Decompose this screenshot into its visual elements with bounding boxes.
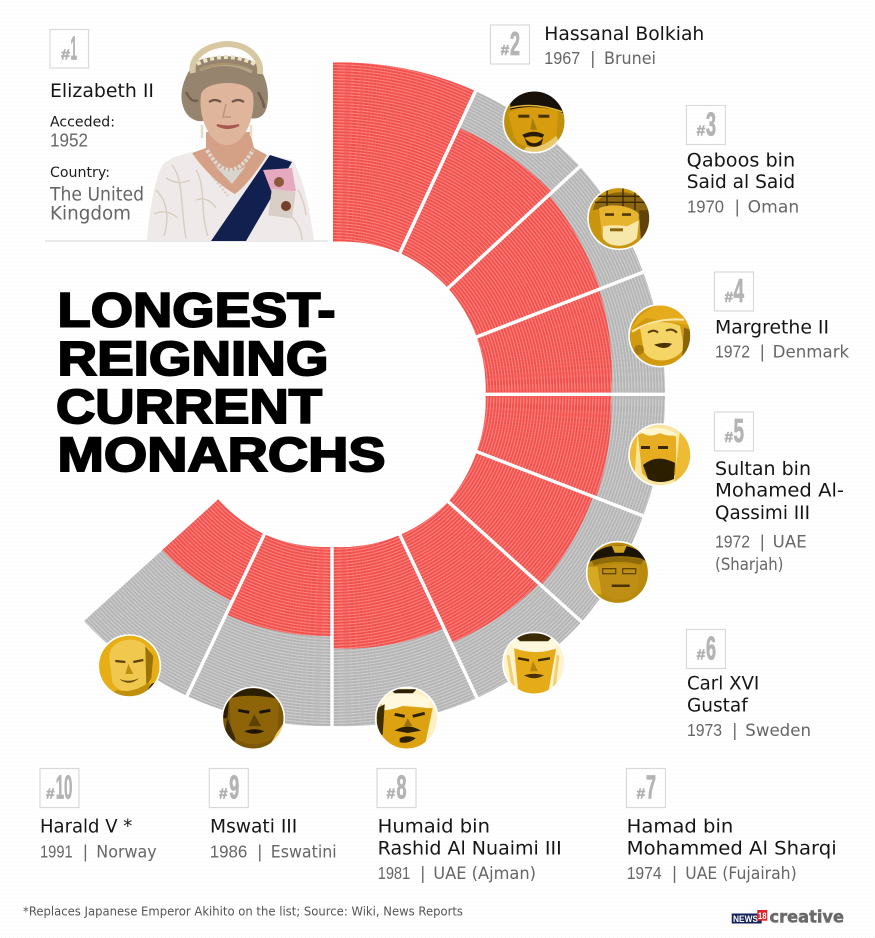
- nose: [223, 104, 231, 117]
- entry 2: Hassanal Bolkiah: [490, 23, 704, 68]
- sector 9 gray track: [187, 534, 332, 726]
- rank badge 5: #: [724, 429, 734, 446]
- sector 4 red bar: [477, 289, 612, 394]
- title: MONARCHS: [58, 429, 386, 482]
- entry 1 text: Elizabeth II: Elizabeth II: [50, 80, 154, 102]
- entry 4: Margrethe II: Margrethe II: [715, 316, 829, 338]
- entry 1 text: Elizabeth II: Kingdom: [50, 204, 131, 224]
- portrait: Harald V: [98, 635, 160, 697]
- entry 8: Humaid bin Rashid Al Nuaimi III: UAE (Ajman): [433, 864, 536, 883]
- entry 8: Humaid bin Rashid Al Nuaimi III: 1981: [378, 863, 410, 883]
- entry 5: Sultan bin Mohamed Al-Qassimi III: Qassimi III: [715, 502, 810, 524]
- rank badge 1: 1: [70, 30, 77, 66]
- entry 5: Sultan bin Mohamed Al-Qassimi III: Mohamed Al-: [715, 480, 844, 502]
- rank badge 1: [50, 30, 88, 68]
- entry 5: Sultan bin Mohamed Al-Qassimi III: [714, 412, 844, 574]
- earrings: [202, 125, 251, 138]
- entry 10: Harald V: Norway: [96, 842, 157, 861]
- entry 7: Hamad bin Mohammed Al Sharqi: |: [672, 864, 677, 883]
- entry 6: Carl XVI Gustaf: Carl XVI: [687, 672, 759, 694]
- entry 1 text: Elizabeth II: Acceded:: [50, 114, 115, 130]
- portrait: Elizabeth II: [147, 44, 314, 241]
- sector 2 red bar: [400, 128, 552, 288]
- rank badge 3: #: [697, 122, 706, 140]
- sector 3 red bar: [448, 195, 600, 337]
- rank badge 7: 7: [646, 768, 656, 806]
- chart: radial reign-length bars: [84, 62, 668, 729]
- sector 5 gray track: [477, 394, 665, 516]
- rank badge 8: [377, 768, 416, 808]
- sector 7 red bar: [400, 502, 539, 643]
- rank badge 10: 10: [56, 768, 72, 806]
- sector 5 red bar: [477, 394, 611, 498]
- rank badge 2: 2: [510, 25, 520, 62]
- entry 1 text: Elizabeth II: Country:: [50, 165, 110, 181]
- necklace: [207, 150, 253, 170]
- portrait: Margrethe II: [629, 305, 691, 367]
- sash: [211, 155, 292, 241]
- sector 8 gray track: [332, 535, 477, 726]
- rank badge 9: [209, 768, 248, 808]
- portrait: Humaid bin Rashid Al Nuaimi III: [376, 687, 438, 749]
- entry 5: Sultan bin Mohamed Al-Qassimi III: UAE: [773, 532, 807, 552]
- entry 1 text: Elizabeth II: The United: [49, 184, 144, 206]
- entry 7: Hamad bin Mohammed Al Sharqi: UAE (Fujairah): [685, 864, 797, 883]
- entry 4: Margrethe II: Denmark: [773, 342, 850, 362]
- neck and chest: [192, 132, 267, 194]
- portrait: Sultan bin Mohamed Al-Qassimi III: [629, 424, 691, 486]
- entry 9: Mswati III: Eswatini: [271, 842, 337, 861]
- mouth: [217, 125, 239, 128]
- rank badge 10: #: [46, 786, 55, 802]
- sector 6 gray track: [448, 452, 643, 622]
- title: LONGEST-: [58, 284, 336, 338]
- rank badge 1: #: [61, 46, 71, 64]
- sector 2 gray track: [400, 91, 580, 288]
- entry 10: Harald V: |: [83, 842, 88, 861]
- entry 9: Mswati III: Mswati III: [210, 816, 297, 838]
- entry 1 text: Elizabeth II: [49, 30, 154, 224]
- dress: [147, 152, 314, 241]
- portrait: Qaboos bin Said al Said: [588, 186, 650, 249]
- rank badge 6: 6: [706, 630, 716, 666]
- entry 3: Qaboos bin Said al Said: |: [734, 198, 740, 216]
- title: CURRENT: [56, 381, 322, 434]
- rank badge 2: [490, 25, 530, 64]
- entry 7: Hamad bin Mohammed Al Sharqi: 1974: [627, 863, 662, 883]
- entry 2: Hassanal Bolkiah: |: [590, 49, 596, 68]
- entry 10: Harald V: 1991: [40, 841, 73, 861]
- entry 4: Margrethe II: [714, 272, 850, 362]
- entry 9: Mswati III: 1986: [210, 841, 247, 861]
- rank badge 8: #: [387, 786, 396, 802]
- rank badge 4: [714, 272, 754, 311]
- entry 4: Margrethe II: 1972: [715, 342, 750, 362]
- entry 1 text: Elizabeth II: 1952: [50, 130, 88, 150]
- entry 5: Sultan bin Mohamed Al-Qassimi III: |: [760, 532, 765, 552]
- logo: News18 Creative: 18: [758, 911, 766, 921]
- logo: News18 Creative: NEWS: [733, 914, 758, 925]
- entry 6: Carl XVI Gustaf: 1973: [687, 720, 722, 740]
- sector 4 gray track: [477, 272, 665, 394]
- entry 3: Qaboos bin Said al Said: [686, 106, 799, 216]
- sector 10 gray track: [84, 499, 264, 696]
- entry 2: Hassanal Bolkiah: 1967: [544, 48, 580, 68]
- entry 3: Qaboos bin Said al Said: Qaboos bin: [687, 150, 795, 172]
- entry 10: Harald V: [40, 768, 157, 861]
- entry 8: Humaid bin Rashid Al Nuaimi III: [377, 768, 562, 883]
- rank badge 5: 5: [734, 412, 744, 449]
- logo: News18 Creative: creative: [770, 907, 844, 927]
- entry 8: Humaid bin Rashid Al Nuaimi III: Humaid bin: [378, 816, 490, 838]
- title: REIGNING: [58, 333, 328, 386]
- entry 3: Qaboos bin Said al Said: 1970: [687, 196, 724, 216]
- eyes: [209, 100, 244, 102]
- rank badge 7: [626, 768, 666, 808]
- rank badge 3: 3: [706, 106, 716, 142]
- entry 4: Margrethe II: |: [760, 342, 765, 362]
- entry 6: Carl XVI Gustaf: [686, 630, 811, 740]
- portrait: Mswati III: [222, 687, 284, 749]
- sector 9 red bar: [226, 534, 332, 636]
- entry 6: Carl XVI Gustaf: Gustaf: [687, 694, 749, 716]
- rank badge 4: 4: [734, 272, 744, 309]
- sector 8 red bar: [332, 535, 444, 649]
- hair: [181, 56, 268, 121]
- entry 7: Hamad bin Mohammed Al Sharqi: Mohammed Al Sharqi: [627, 837, 837, 859]
- rank badge 6: [686, 630, 726, 668]
- rank badge 8: 8: [396, 768, 406, 806]
- entry 9: Mswati III: |: [257, 842, 263, 861]
- entry 8: Humaid bin Rashid Al Nuaimi III: |: [420, 864, 426, 883]
- entry 9: Mswati III: [209, 768, 337, 861]
- rank badge 6: #: [697, 646, 706, 664]
- rank badge 5: [714, 412, 754, 451]
- rank badge 3: [686, 106, 726, 144]
- entry 6: Carl XVI Gustaf: Sweden: [745, 721, 811, 740]
- rank badge 10: [40, 768, 79, 808]
- sector 7 gray track: [400, 502, 582, 698]
- rank badge 2: #: [501, 42, 510, 59]
- entry 5: Sultan bin Mohamed Al-Qassimi III: Sultan bin: [715, 458, 811, 480]
- entry 3: Qaboos bin Said al Said: Said al Said: [687, 171, 795, 193]
- portrait: Carl XVI Gustaf: [587, 542, 649, 604]
- entry 7: Hamad bin Mohammed Al Sharqi: Hamad bin: [627, 816, 733, 838]
- rank badge 7: #: [637, 786, 646, 802]
- rank badge 9: #: [219, 786, 228, 802]
- portrait: Hamad bin Mohammed Al Sharqi: [503, 632, 565, 694]
- entry 5: Sultan bin Mohamed Al-Qassimi III: (Sharjah): [715, 555, 784, 574]
- entry 2: Hassanal Bolkiah: Brunei: [604, 49, 656, 68]
- portrait: Hassanal Bolkiah: [503, 91, 565, 153]
- face: [200, 83, 254, 145]
- sector 10 red bar: [162, 499, 264, 601]
- sector 6 red bar: [448, 452, 593, 585]
- rank badge 4: #: [724, 289, 734, 306]
- entry 2: Hassanal Bolkiah: Hassanal Bolkiah: [544, 23, 704, 45]
- entry 5: Sultan bin Mohamed Al-Qassimi III: 1972: [715, 532, 750, 552]
- sector 1 Elizabeth II: [333, 62, 476, 253]
- footnote: *Replaces Japanese Emperor Akihito on the list; Source: Wiki, News Reports: [23, 904, 463, 918]
- rank badge 9: 9: [229, 768, 239, 806]
- entry 7: Hamad bin Mohammed Al Sharqi: [626, 768, 837, 883]
- logo: News18 Creative: [732, 907, 844, 927]
- entry 3: Qaboos bin Said al Said: Oman: [748, 198, 799, 216]
- title: [56, 284, 386, 482]
- sector 3 gray track: [448, 166, 643, 337]
- entry 10: Harald V: Harald V *: [40, 816, 132, 838]
- entry 8: Humaid bin Rashid Al Nuaimi III: Rashid Al Nuaimi III: [378, 837, 562, 859]
- pink ribbon and medals: [263, 168, 296, 193]
- entry 6: Carl XVI Gustaf: |: [732, 721, 738, 740]
- tiara: [193, 44, 260, 74]
